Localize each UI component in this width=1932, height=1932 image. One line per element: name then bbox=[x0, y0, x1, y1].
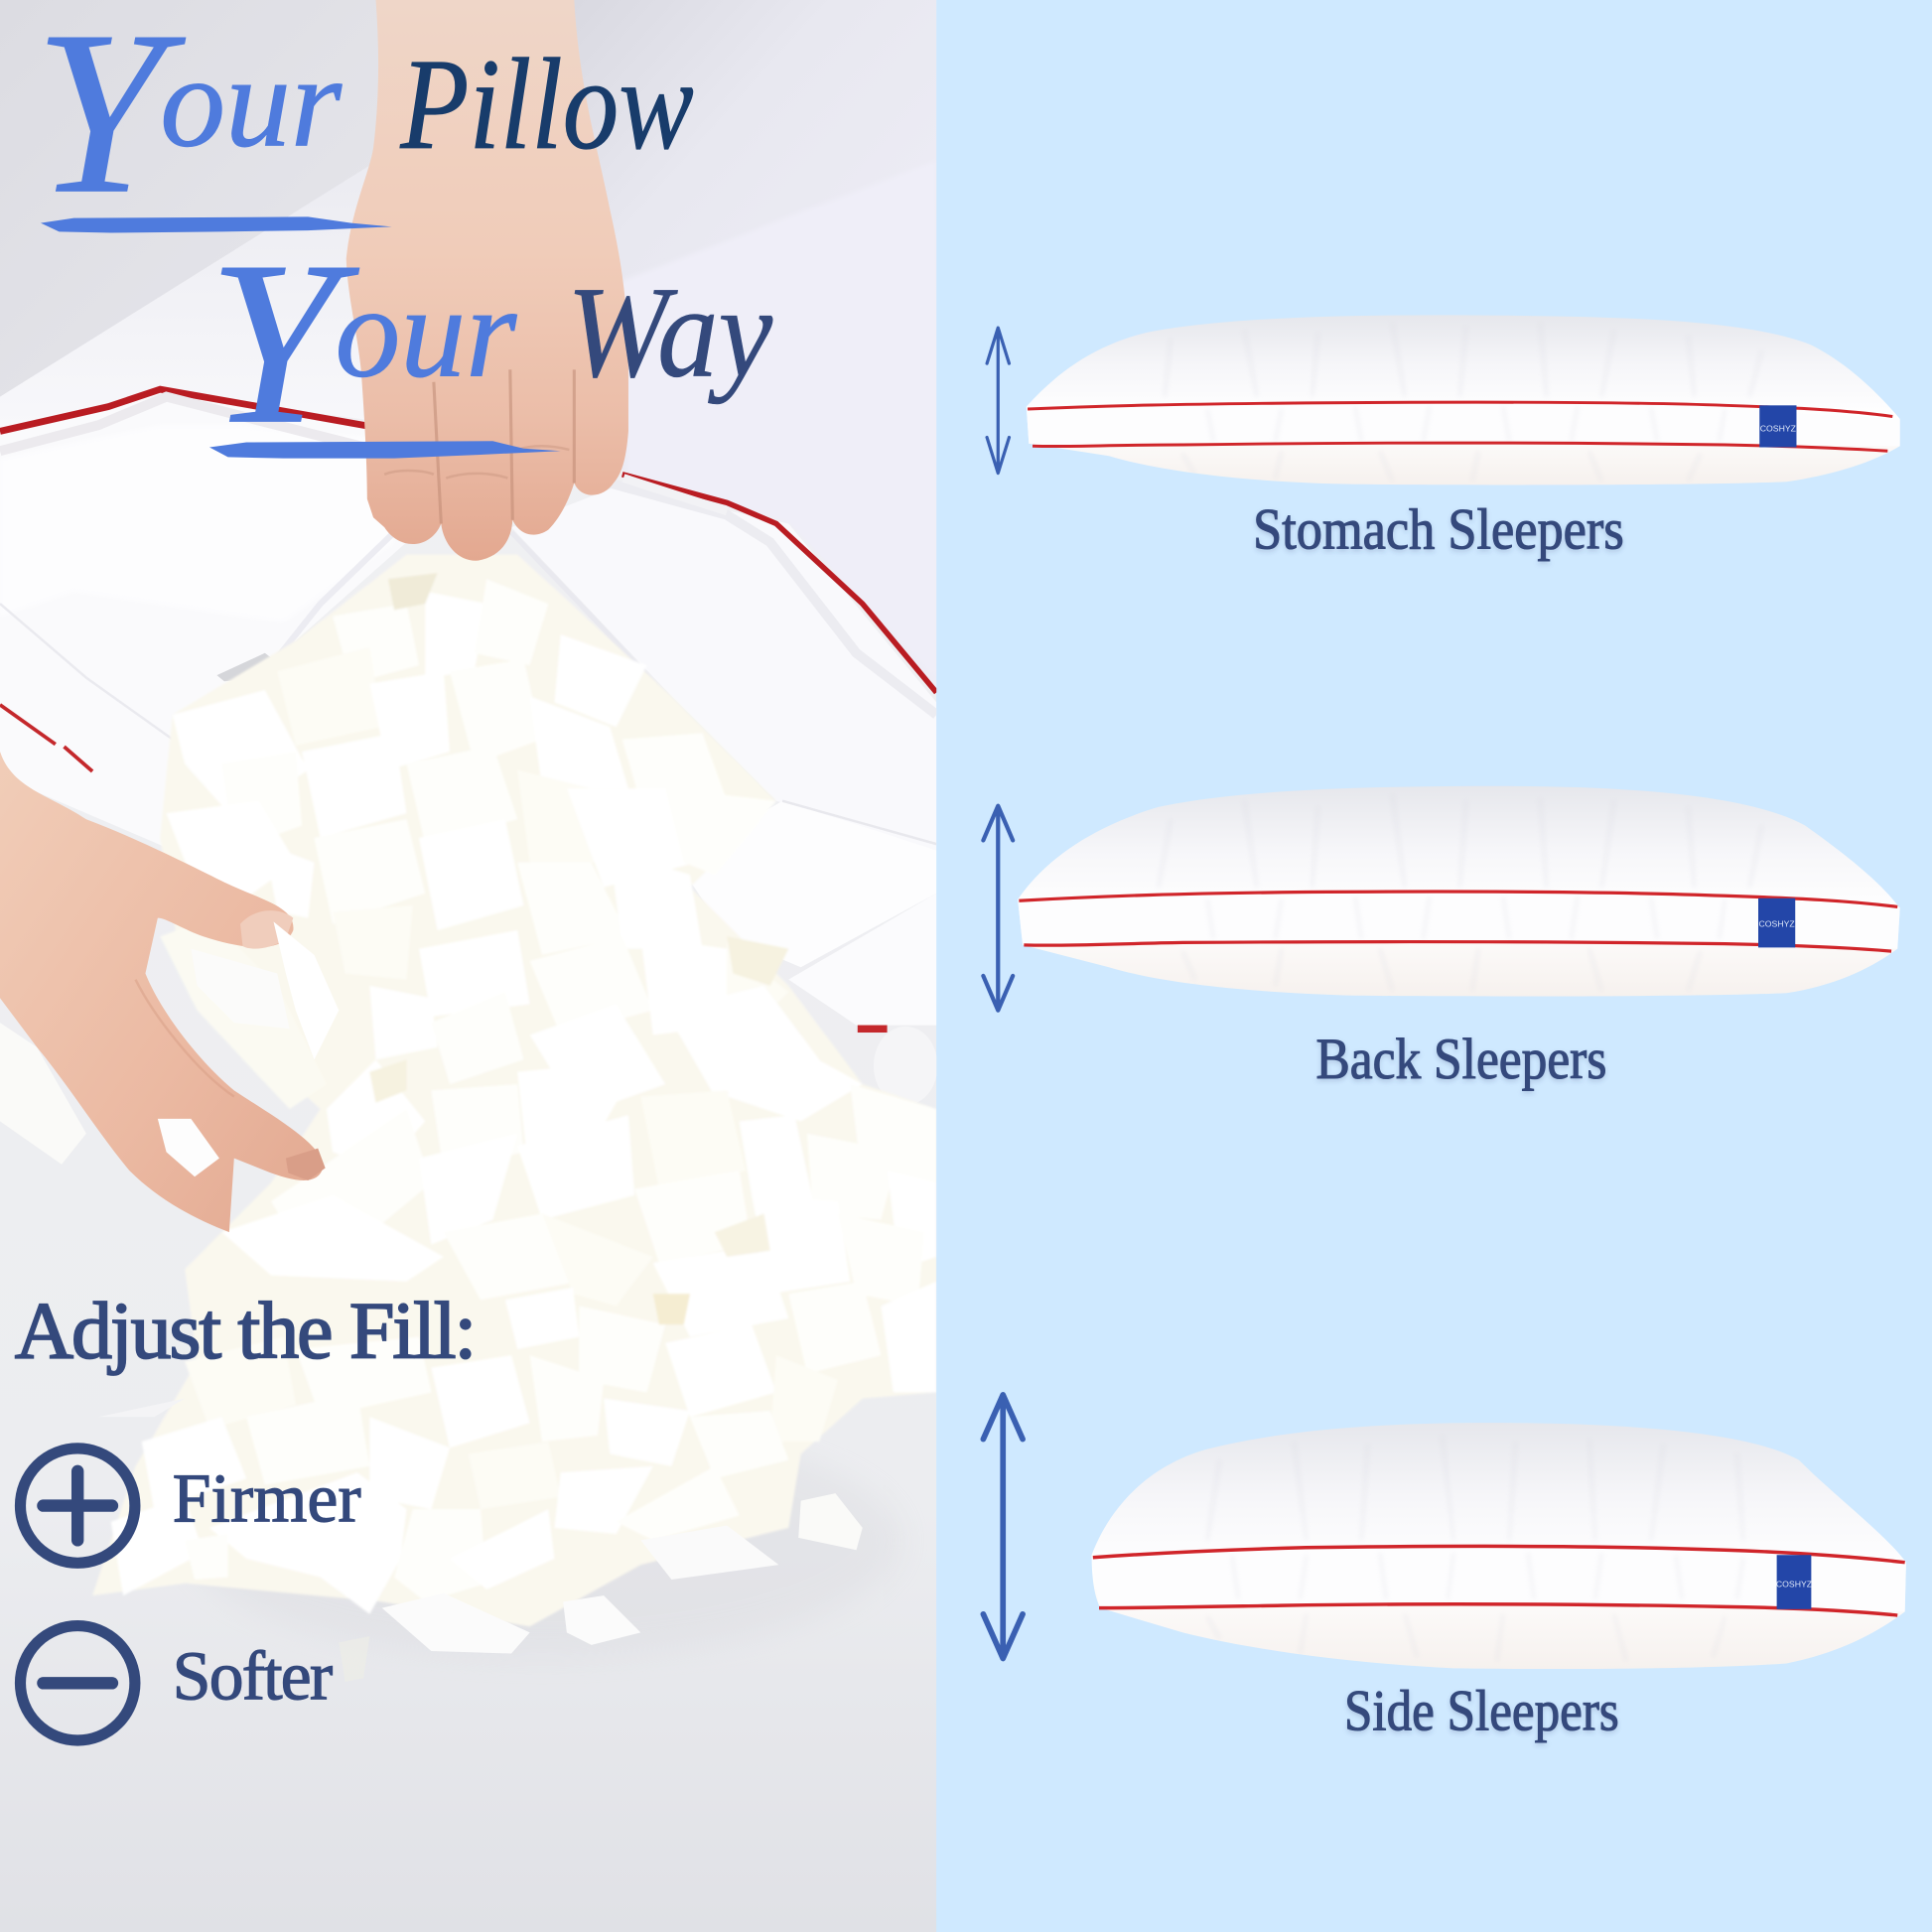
label: Firmer: Firmer bbox=[173, 1461, 361, 1538]
title word: Way: Way bbox=[567, 261, 773, 405]
zipper edge over fingers bbox=[623, 474, 709, 500]
heading: Adjust the Fill: Adjust the Fill: bbox=[15, 1286, 477, 1376]
arrow: high loft bbox=[983, 1395, 1023, 1658]
brush underline 2 bbox=[209, 441, 561, 459]
label: Side Sleepers: Side Sleepers bbox=[1344, 1678, 1619, 1742]
icon: minus bbox=[20, 1626, 135, 1740]
title bbox=[35, 0, 773, 473]
title word: Your (second line): Y bbox=[208, 213, 360, 473]
lower hand fingernails bbox=[240, 910, 293, 949]
panel: stomach sleepers bbox=[987, 315, 1900, 561]
pillow: high loft: COSHYZ bbox=[1776, 1579, 1813, 1588]
pillow: low loft: COSHYZ bbox=[1760, 423, 1797, 433]
upper hand bbox=[346, 0, 628, 561]
panel: photo of hands adjusting pillow fill bbox=[0, 0, 937, 1932]
loose foam chunks on floor bbox=[98, 1399, 863, 1682]
floor shadows under foam bbox=[185, 1423, 899, 1657]
shaded gaps bbox=[653, 1294, 690, 1324]
foam at left edge bbox=[0, 1023, 86, 1165]
fill adjustment legend bbox=[15, 1286, 477, 1740]
pillow: medium loft bbox=[1018, 786, 1900, 997]
label: Back Sleepers: Back Sleepers bbox=[1315, 1027, 1606, 1091]
title word: Your (first line): our bbox=[160, 30, 343, 174]
foam pieces over lower hand bbox=[274, 921, 339, 1059]
icon: plus bbox=[20, 1449, 135, 1563]
label: Stomach Sleepers: Stomach Sleepers bbox=[1253, 496, 1624, 561]
zipper pull bbox=[216, 653, 270, 681]
brush underline 1 bbox=[41, 216, 392, 233]
pillow: high loft bbox=[1092, 1423, 1906, 1669]
backdrop: top right pillow bbox=[574, 0, 911, 263]
red zipper piping, right bbox=[622, 475, 936, 692]
arrow: low loft bbox=[987, 328, 1009, 474]
foam pile bbox=[92, 554, 936, 1626]
panel: side sleepers bbox=[983, 1395, 1906, 1742]
title word: Pillow: Pillow bbox=[399, 33, 694, 177]
panel: back sleepers bbox=[983, 786, 1900, 1091]
label: Softer: Softer bbox=[173, 1638, 333, 1715]
inner pillow cover, right bbox=[511, 486, 936, 850]
backdrop: top left grey surface bbox=[0, 0, 394, 400]
pillow: medium loft: COSHYZ bbox=[1759, 918, 1795, 928]
pillow: low loft bbox=[1027, 315, 1900, 484]
lower hand bbox=[0, 752, 323, 1232]
red zipper piping, left bbox=[0, 389, 369, 431]
pillow flap, upper left bbox=[0, 167, 369, 427]
arrow: medium loft bbox=[983, 806, 1013, 1011]
inner pillow cover, left bbox=[0, 392, 407, 850]
title word: Your (second line): our bbox=[336, 261, 517, 405]
